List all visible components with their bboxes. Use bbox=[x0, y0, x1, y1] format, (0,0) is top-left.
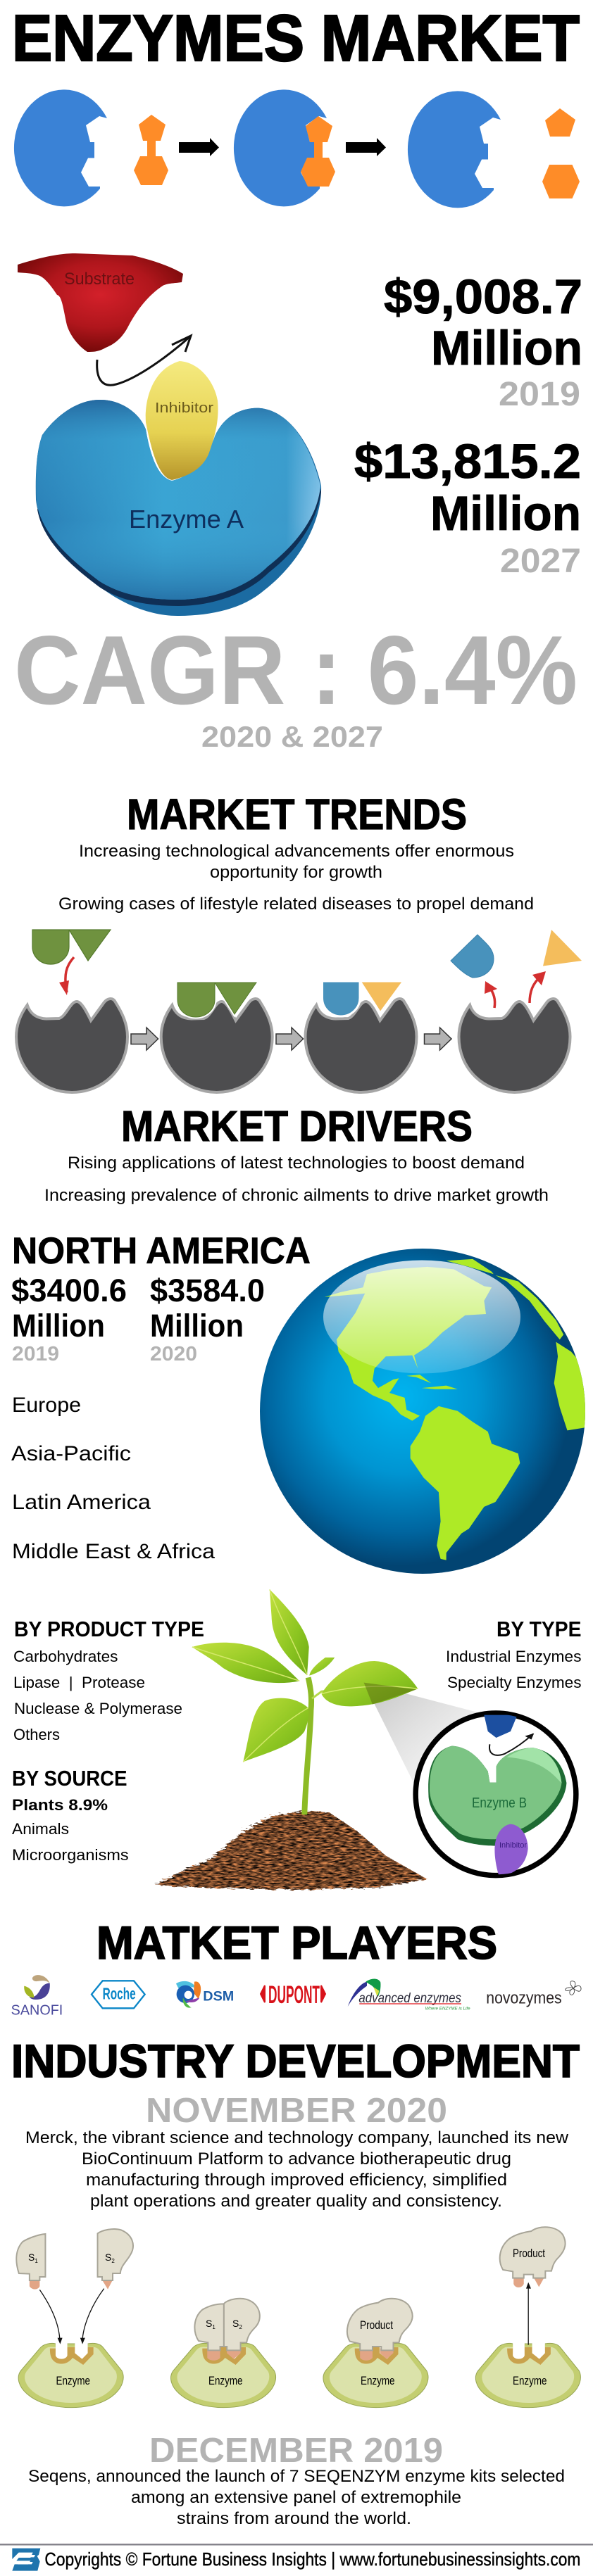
text: seqens announcement: among an extensive panel of extremophile bbox=[131, 2488, 461, 2507]
logo: roche bbox=[92, 1981, 145, 2008]
illustration: substrate, inhibitor and enzyme A bbox=[18, 253, 321, 616]
logo: advanced enzymes: Where ENZYME is Life bbox=[425, 2007, 470, 2012]
enzyme step 3 bbox=[408, 91, 580, 208]
segment: by source bbox=[12, 1766, 129, 1864]
text: market trends: Increasing technological advancements offer enormous bbox=[79, 842, 514, 861]
segment: by product type: Lipase | Protease bbox=[13, 1674, 145, 1691]
diagram labels: 2 bbox=[111, 2258, 115, 2264]
list: other regions bbox=[11, 1394, 215, 1563]
stage 2 bbox=[161, 983, 273, 1092]
panel: north america: $3584.0 bbox=[150, 1273, 265, 1308]
diagram labels: S bbox=[232, 2318, 239, 2329]
text: merck announcement: plant operations and greater quality and consistency. bbox=[90, 2192, 502, 2211]
substrate: Substrate bbox=[64, 270, 135, 289]
enzyme A body bbox=[36, 400, 321, 616]
diagram labels bbox=[28, 2247, 547, 2387]
stat: 2019 market size bbox=[384, 270, 582, 413]
arrow bbox=[424, 1028, 451, 1050]
panel: north america: $3400.6 bbox=[11, 1273, 127, 1308]
date: december 2019: DECEMBER 2019 bbox=[149, 2432, 443, 2470]
diagram labels: Product bbox=[513, 2247, 545, 2260]
arrow bbox=[131, 1028, 158, 1050]
panel: north america bbox=[11, 1230, 311, 1365]
enzyme step 1 bbox=[14, 89, 168, 206]
logo: dupont: DUPONT bbox=[268, 1981, 320, 2009]
text: market trends bbox=[58, 842, 534, 914]
diagram labels: Enzyme bbox=[513, 2374, 547, 2387]
segment: by source: Animals bbox=[12, 1820, 69, 1838]
stat: 2027 market size bbox=[354, 434, 581, 580]
text: merck announcement: manufacturing through improved efficiency, simplified bbox=[86, 2171, 507, 2190]
inhibitor bbox=[146, 361, 218, 480]
stage 1 bbox=[16, 930, 127, 1092]
text: market trends: Growing cases of lifestyle related diseases to propel demand bbox=[58, 895, 534, 914]
panel: north america: Million bbox=[12, 1308, 105, 1344]
arrow bbox=[276, 1028, 303, 1050]
islands bbox=[406, 1375, 458, 1389]
illustration: plant in soil with enzyme magnifier bbox=[155, 1589, 576, 1890]
footer logo bbox=[12, 2549, 40, 2571]
leaf veins bbox=[192, 1589, 418, 1762]
logo: dsm bbox=[176, 1981, 234, 2008]
heading: market trends: MARKET TRENDS bbox=[127, 790, 467, 838]
enzyme A body: Enzyme A bbox=[129, 505, 244, 533]
segment: by product type: Carbohydrates bbox=[13, 1648, 118, 1665]
date: november 2020: NOVEMBER 2020 bbox=[146, 2092, 447, 2130]
leaf overlay bbox=[364, 1683, 416, 1705]
diagram: enzyme lock and key sequence bbox=[16, 930, 582, 1092]
enzymes bbox=[18, 2343, 580, 2408]
stat: 2027 market size: $13,815.2 bbox=[354, 434, 581, 488]
logo: roche: Roche bbox=[103, 1984, 136, 2002]
stat: 2027 market size: Million bbox=[430, 486, 581, 541]
diagram labels: Product bbox=[360, 2318, 393, 2332]
plant stem bbox=[304, 1677, 311, 1814]
text: market drivers bbox=[44, 1154, 549, 1205]
segment: by source: Microorganisms bbox=[12, 1846, 129, 1864]
south america bbox=[411, 1406, 520, 1560]
logo: sanofi: SANOFI bbox=[11, 2002, 63, 2019]
diagram labels: 1 bbox=[212, 2324, 216, 2330]
segment: by type: Specialty Enzymes bbox=[447, 1674, 582, 1691]
magnifier circle: enzyme B bbox=[416, 1713, 576, 1877]
step 4 released product bbox=[500, 2227, 566, 2345]
logo: novozymes: novozymes bbox=[486, 1989, 562, 2008]
segment: by product type bbox=[13, 1617, 204, 1743]
diagram labels: Enzyme bbox=[56, 2374, 90, 2387]
panel: north america: NORTH AMERICA bbox=[12, 1230, 311, 1272]
segment: by product type: BY PRODUCT TYPE bbox=[14, 1617, 204, 1641]
segment: by source: BY SOURCE bbox=[12, 1766, 127, 1791]
text: merck announcement bbox=[25, 2128, 569, 2211]
arrow 2 bbox=[346, 138, 386, 156]
step 2 bound substrates bbox=[194, 2299, 260, 2361]
arrow 1 bbox=[179, 138, 219, 156]
list: other regions: Latin America bbox=[12, 1491, 151, 1514]
africa and europe bbox=[447, 1258, 585, 1430]
panel: north america: 2020 bbox=[150, 1343, 197, 1365]
logo: advanced enzymes: advanced enzymes bbox=[358, 1991, 461, 2006]
diagram labels: Enzyme bbox=[208, 2374, 242, 2387]
text: market drivers: Increasing prevalence of chronic ailments to drive market growth bbox=[44, 1186, 549, 1205]
inhibitor: Inhibitor bbox=[155, 400, 213, 416]
enzyme B labels: Inhibitor bbox=[499, 1841, 527, 1850]
diagram: enzyme substrate product steps bbox=[16, 2227, 580, 2408]
enzyme B labels: Enzyme B bbox=[472, 1795, 527, 1811]
text: merck announcement: BioContinuum Platform to advance biotherapeutic drug bbox=[82, 2149, 511, 2168]
diagram labels: S bbox=[105, 2252, 111, 2263]
panel: north america: 2019 bbox=[12, 1343, 59, 1365]
diagram: blue enzyme and orange substrate sequence bbox=[14, 89, 580, 208]
text: merck announcement: Merck, the vibrant science and technology company, launched its new bbox=[25, 2128, 569, 2147]
stage 3 bbox=[306, 981, 417, 1092]
enzyme step 2 bbox=[234, 89, 335, 206]
heading: market players: MATKET PLAYERS bbox=[96, 1917, 497, 1969]
north america bbox=[325, 1267, 492, 1421]
stat: 2019 market size: Million bbox=[431, 321, 582, 375]
step 3 product bbox=[347, 2299, 413, 2361]
logo: dsm: DSM bbox=[203, 1989, 234, 2004]
heading: market drivers: MARKET DRIVERS bbox=[121, 1102, 473, 1150]
diagram labels: 1 bbox=[35, 2258, 38, 2264]
text: market trends: opportunity for growth bbox=[210, 863, 382, 882]
list: other regions: Asia-Pacific bbox=[11, 1442, 131, 1465]
list: other regions: Europe bbox=[12, 1394, 81, 1417]
segment: by product type: Others bbox=[13, 1726, 60, 1743]
text: market drivers: Rising applications of latest technologies to boost demand bbox=[68, 1154, 525, 1173]
enzyme B labels bbox=[472, 1795, 527, 1850]
magnifier cone bbox=[364, 1683, 488, 1788]
substrate bbox=[18, 253, 183, 352]
diagram labels: Enzyme bbox=[361, 2374, 394, 2387]
segment: by type bbox=[446, 1617, 582, 1691]
glass highlight bbox=[323, 1260, 520, 1374]
segment: by source: Plants 8.9% bbox=[12, 1796, 108, 1814]
stat: 2019 market size: 2019 bbox=[499, 376, 580, 413]
step 1 substrates bbox=[16, 2229, 133, 2344]
globe bbox=[260, 1249, 590, 1574]
diagram labels: S bbox=[28, 2252, 35, 2263]
curved arrow bbox=[97, 336, 191, 385]
stage 4 bbox=[451, 930, 582, 1092]
segment: by type: BY TYPE bbox=[497, 1617, 582, 1641]
stat: 2027 market size: 2027 bbox=[500, 543, 581, 580]
diagram labels: 2 bbox=[239, 2324, 242, 2330]
logo: sanofi bbox=[11, 1975, 63, 2019]
diagram labels: S bbox=[206, 2318, 212, 2329]
logo: dupont bbox=[261, 1981, 325, 2009]
stat: CAGR: 2020 & 2027 bbox=[201, 720, 383, 753]
leaves bbox=[192, 1589, 418, 1762]
soil mound bbox=[155, 1811, 427, 1890]
logo: advanced enzymes bbox=[348, 1979, 470, 2012]
text: seqens announcement bbox=[28, 2467, 565, 2528]
segment: by product type: Nuclease & Polymerase bbox=[14, 1700, 182, 1717]
list: other regions: Middle East & Africa bbox=[12, 1540, 215, 1563]
logo: novozymes bbox=[486, 1981, 581, 2008]
text: seqens announcement: Seqens, announced the launch of 7 SEQENZYM enzyme kits selected bbox=[28, 2467, 565, 2486]
segment: by type: Industrial Enzymes bbox=[446, 1648, 582, 1665]
stat: 2019 market size: $9,008.7 bbox=[384, 270, 582, 324]
text: seqens announcement: strains from around the world. bbox=[177, 2509, 411, 2528]
panel: north america: Million bbox=[150, 1308, 244, 1344]
